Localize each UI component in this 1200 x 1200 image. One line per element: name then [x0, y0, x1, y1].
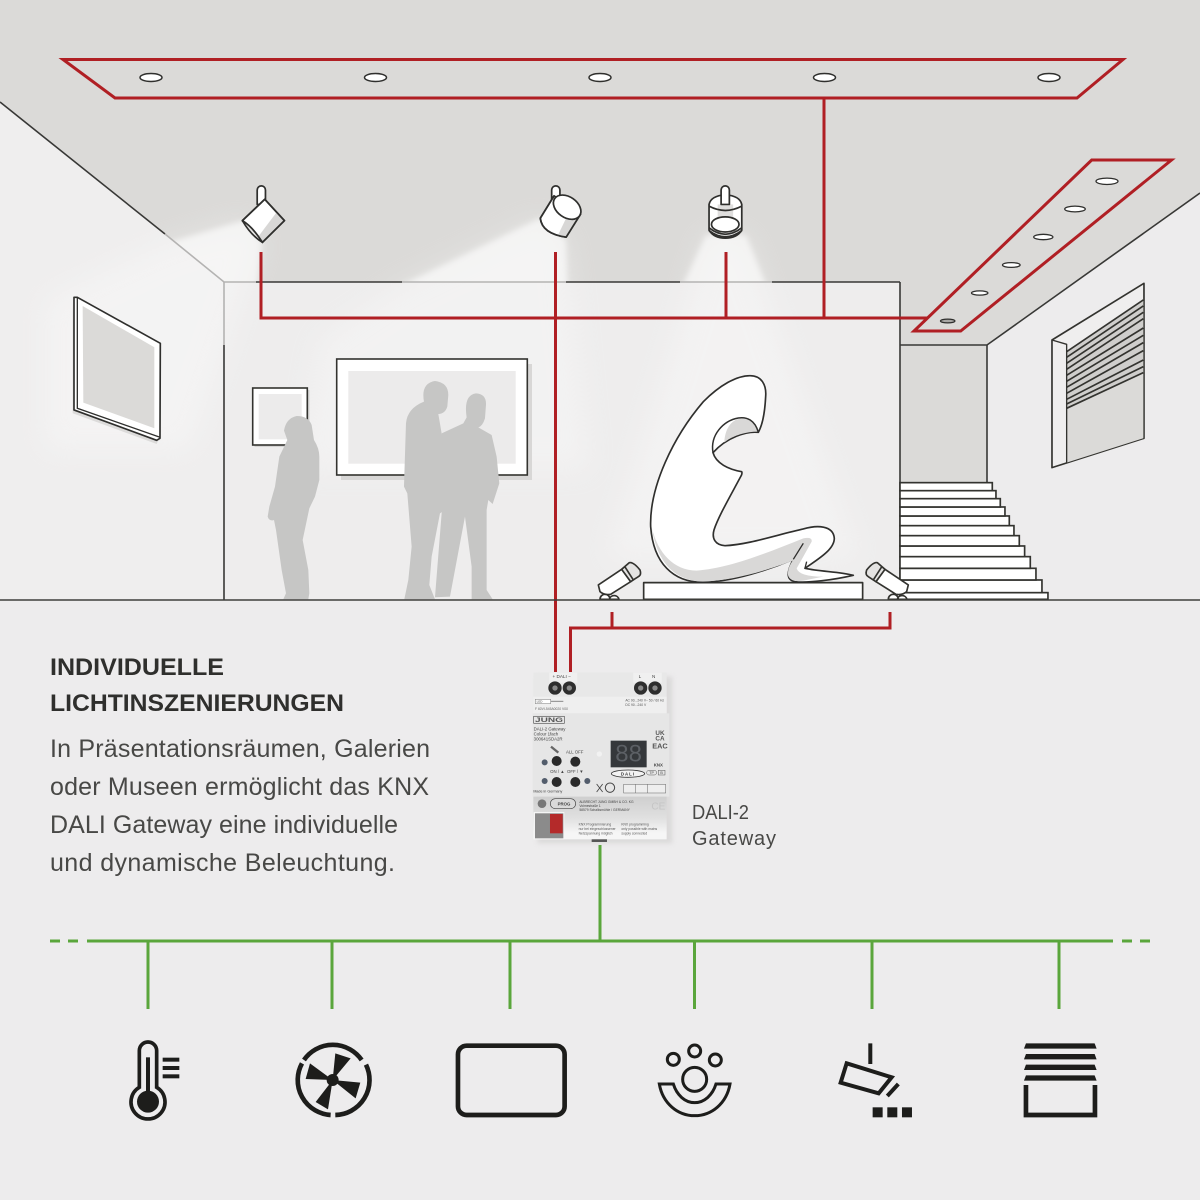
device: DALI-2 gateway [533, 673, 672, 843]
heading: LICHTINSZENIERUNGEN [50, 690, 344, 717]
sculpture body [651, 376, 853, 582]
wire frame: diagonal ceiling panel [914, 160, 1172, 331]
green KNX bus [50, 845, 1150, 1009]
device label: Gateway [692, 828, 776, 850]
ceiling spotlight 3 [709, 186, 742, 238]
back wall [224, 282, 900, 600]
beam: right spotlight on wall [606, 235, 860, 560]
beam: left spotlight on walls [45, 220, 262, 450]
heading [50, 654, 344, 717]
stairs [900, 483, 1048, 599]
ceiling [0, 0, 1200, 345]
device lower section: nur bei eingeschlossener [579, 827, 617, 831]
icon: light scene [659, 1045, 730, 1116]
sculpture inner shadow [724, 419, 758, 442]
silhouette: woman [268, 416, 319, 599]
device front panel: 300641SDA2R [534, 736, 563, 741]
silhouette: second man [435, 393, 499, 599]
device front panel: 88 [615, 741, 642, 768]
device front panel: DALI [621, 771, 635, 776]
window with blind [1052, 283, 1144, 468]
device front panel [533, 713, 669, 797]
DALI logo [611, 770, 645, 777]
device front panel: Made in Germany [533, 789, 563, 793]
device top terminals: + DALI − [552, 674, 571, 679]
device front panel: JUNG [535, 717, 563, 724]
device lower section: Netzspannung möglich [579, 832, 613, 836]
device front panel: KNX [654, 763, 663, 768]
device top terminals: F 60VI-545A0020 V00 [535, 707, 568, 711]
beam: middle spotlight on wall [300, 218, 590, 470]
device top terminals: L [639, 674, 642, 679]
panel: large picture frame [337, 359, 532, 480]
recessed lights: top row [140, 74, 1060, 82]
ceiling spotlight 2 [540, 186, 585, 237]
device display [611, 741, 647, 767]
device top terminals: DC 90...240 V [625, 703, 647, 707]
wires: ceiling bus [261, 98, 928, 318]
device front panel: CA [655, 736, 665, 743]
icon: blind [1024, 1043, 1097, 1115]
device top terminals: LED [537, 700, 543, 704]
device lower section: PROG [558, 801, 571, 806]
device front panel: ALL OFF [566, 750, 584, 755]
device label: DALI-2 [692, 802, 749, 824]
device lower section [533, 797, 667, 842]
device front panel: TP [649, 771, 655, 775]
device lower section: KNX Programmierung [579, 822, 611, 826]
floor spotlight right [866, 563, 908, 599]
recessed lights: diagonal row [940, 178, 1118, 323]
panel: left wall painting [73, 297, 160, 444]
sculpture shadow [652, 528, 823, 581]
device lower section: ALBRECHT JUNG GMBH & CO. KG [579, 800, 634, 804]
body text: und dynamische Beleuchtung. [50, 849, 395, 877]
device red connector [534, 812, 564, 839]
icon: thermometer [131, 1042, 179, 1119]
wire: floor spots [570, 612, 890, 672]
wire: to gateway [554, 252, 557, 672]
device top terminals: N [652, 674, 655, 679]
device front panel: Colour 1fach [534, 731, 559, 736]
device front panel: DALI-2 Gateway [534, 726, 566, 731]
washed outline in beam [165, 234, 772, 345]
icon: spotlight with dots [841, 1043, 912, 1117]
body text: DALI Gateway eine individuelle [50, 811, 398, 839]
device front panel: OFF / ▼ [567, 769, 584, 774]
icon: fan [298, 1045, 370, 1115]
body text: In Präsentationsräumen, Galerien [50, 735, 430, 763]
body text: oder Museen ermöglicht das KNX [50, 773, 429, 801]
body text [50, 735, 430, 877]
device lower section: Volmestraße 1 [579, 804, 601, 808]
ceiling spotlight 1 [242, 186, 284, 242]
left wall tint [0, 102, 224, 600]
corridor opening [900, 345, 987, 485]
floor line [0, 599, 1200, 601]
silhouette: man [404, 381, 449, 599]
red DALI wiring [63, 60, 1172, 672]
blind slats [1067, 300, 1143, 408]
device top terminals [533, 673, 667, 714]
blind lower pane [1067, 373, 1143, 463]
sculpture inner contour [713, 418, 758, 453]
device front panel: EAC [652, 742, 668, 751]
device lower section: CE [651, 801, 666, 812]
device front panel: B [660, 771, 663, 775]
light beams [172, 218, 767, 282]
device lower section: KNX programming [621, 822, 649, 826]
device front panel: ON / ▲ [550, 769, 565, 774]
silhouettes: visitors [268, 381, 499, 599]
beams on ceiling [174, 218, 765, 282]
device front panel: UK [655, 730, 665, 737]
device lower section: only possible with mains [621, 827, 658, 831]
device top terminals: AC 90...240 V~ 50 / 60 Hz [625, 698, 664, 702]
device label [692, 802, 776, 850]
icon: rectangle panel [458, 1046, 565, 1115]
heading: INDIVIDUELLE [50, 654, 224, 681]
sculpture with plinth [644, 376, 863, 599]
device lower section: 58579 Schalksmühle / GERMANY [579, 808, 631, 812]
room outline [0, 102, 1200, 600]
device lower section: supply connected [621, 832, 647, 836]
panel: small picture frame [253, 388, 310, 447]
plinth [644, 583, 863, 599]
wire frame: top ceiling panel [63, 60, 1123, 98]
floor spotlight left [598, 563, 641, 599]
